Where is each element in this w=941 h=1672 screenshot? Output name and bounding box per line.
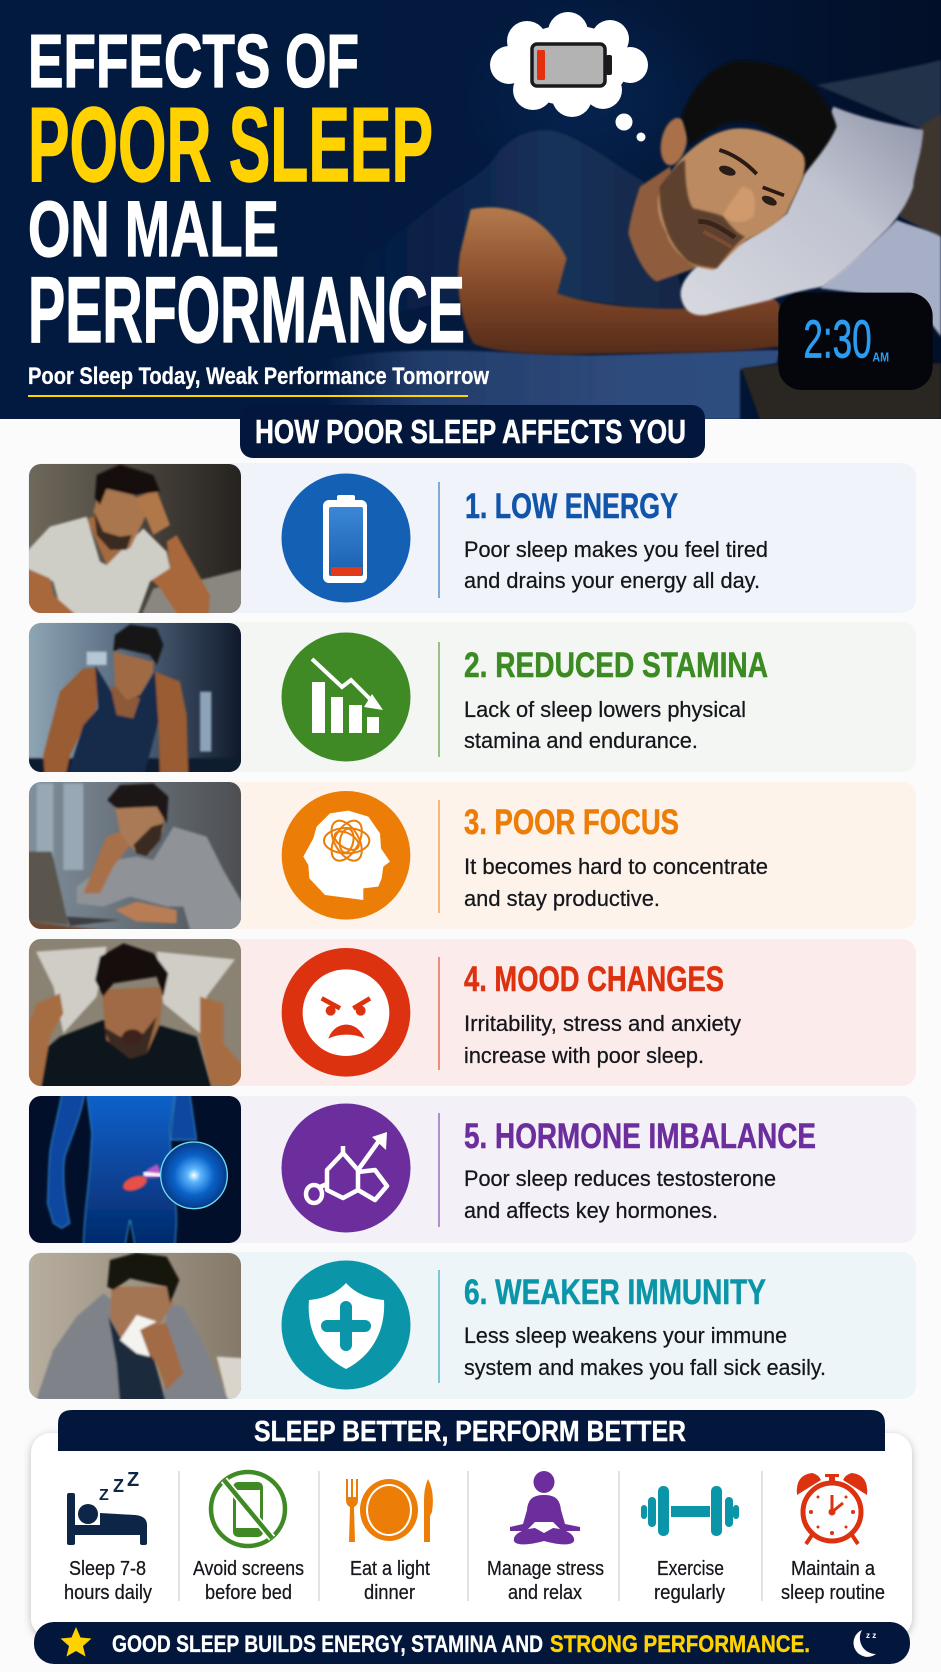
photo: sick man with tissue [29, 1253, 247, 1405]
tip: sleep routine [781, 1473, 885, 1604]
tip: exercise: regularly [654, 1582, 725, 1604]
description: Irritability, stress and anxiety [464, 1011, 741, 1036]
section heading: HOW POOR SLEEP AFFECTS YOU [255, 413, 686, 450]
tip: sleep hours: Z [99, 1487, 109, 1504]
photo: angry man with pillow [23, 939, 247, 1093]
icon: battery [282, 474, 410, 602]
title text: 4. MOOD CHANGES [464, 960, 724, 999]
icon: shield with cross [282, 1260, 410, 1390]
tips heading [58, 1410, 885, 1451]
description: Lack of sleep lowers physical [464, 697, 746, 722]
tip: exercise [641, 1486, 739, 1604]
panel: 1 low energy [23, 463, 916, 618]
tip: manage stress: and relax [508, 1582, 582, 1604]
description [464, 1011, 741, 1068]
icon: star [60, 1627, 92, 1656]
panel: 6 weaker immunity [28, 1252, 916, 1405]
hero banner [0, 0, 941, 419]
panel: 2 reduced stamina [23, 622, 916, 778]
title text: 1. LOW ENERGY [465, 487, 678, 526]
hero title [28, 19, 465, 362]
description: Less sleep weakens your immune [464, 1323, 787, 1348]
tip: avoid screens: Avoid screens [193, 1558, 304, 1580]
description: Poor sleep reduces testosterone [464, 1166, 776, 1191]
tip: sleep hours: hours daily [64, 1582, 152, 1604]
hero title: EFFECTS OF [28, 19, 359, 103]
photo: exhausted man at gym [23, 623, 247, 778]
tip: sleep hours [64, 1469, 152, 1604]
hero title: PERFORMANCE [28, 257, 465, 362]
footer message: GOOD SLEEP BUILDS ENERGY, STAMINA AND [112, 1631, 543, 1658]
hero subtitle: Poor Sleep Today, Weak Performance Tomorrow [28, 363, 489, 390]
alarm clock: 2:30 [803, 311, 872, 370]
description [464, 537, 768, 593]
description: and stay productive. [464, 886, 660, 911]
tip: sleep routine: sleep routine [781, 1582, 885, 1604]
hero photo: sleepless man in bed [323, 0, 941, 419]
tip: sleep hours: Z [113, 1476, 124, 1496]
description [464, 1166, 776, 1223]
tip: sleep hours: Sleep 7-8 [69, 1558, 146, 1580]
icon: falling chart [282, 632, 410, 762]
panel: 5 hormone imbalance [28, 1093, 916, 1247]
description: It becomes hard to concentrate [464, 854, 768, 879]
tip: avoid screens [193, 1472, 304, 1604]
icon: angry face [282, 948, 410, 1077]
panel: 4 mood changes [23, 939, 916, 1093]
tip: light dinner [346, 1479, 433, 1604]
footer message: STRONG PERFORMANCE. [550, 1631, 810, 1658]
photo: tired man holding head [23, 464, 247, 618]
description: and drains your energy all day. [464, 568, 760, 593]
tip: manage stress: Manage stress [487, 1558, 604, 1580]
tip: sleep routine: Maintain a [791, 1558, 876, 1580]
description: increase with poor sleep. [464, 1043, 704, 1068]
tip: light dinner: dinner [364, 1582, 415, 1604]
description: Poor sleep makes you feel tired [464, 537, 768, 562]
description: and affects key hormones. [464, 1198, 718, 1223]
tips heading: SLEEP BETTER, PERFORM BETTER [254, 1416, 686, 1448]
panel: sleep better tips [31, 1410, 912, 1638]
description [464, 854, 768, 911]
alarm clock: AM [872, 350, 889, 364]
hero title: ON MALE [28, 184, 279, 273]
title text: 5. HORMONE IMBALANCE [464, 1117, 816, 1156]
description: system and makes you fall sick easily. [464, 1355, 826, 1380]
title text: 6. WEAKER IMMUNITY [464, 1273, 766, 1312]
description [464, 1323, 826, 1380]
title text: 2. REDUCED STAMINA [464, 646, 768, 685]
panel: 3 poor focus [23, 782, 916, 933]
photo: man at laptop pinching nose [23, 782, 247, 933]
photo: glowing blue anatomy [29, 1093, 241, 1247]
section heading [240, 405, 705, 458]
tip: avoid screens: before bed [205, 1582, 292, 1604]
tip: manage stress [487, 1471, 604, 1604]
description [464, 697, 746, 753]
icon: hormone molecule [282, 1104, 410, 1232]
tip: light dinner: Eat a light [350, 1558, 430, 1580]
icon: head with tangled brain [282, 791, 410, 920]
footer banner [34, 1622, 910, 1664]
tip: exercise: Exercise [657, 1558, 724, 1580]
icon: moon: z z [866, 1631, 876, 1640]
icon: moon [854, 1630, 876, 1657]
alarm clock [778, 293, 933, 390]
hero title: POOR SLEEP [28, 86, 433, 204]
description: stamina and endurance. [464, 728, 698, 753]
title text: 3. POOR FOCUS [464, 803, 679, 842]
thought bubble with low battery [490, 12, 648, 142]
tip: sleep hours: Z [127, 1469, 139, 1491]
